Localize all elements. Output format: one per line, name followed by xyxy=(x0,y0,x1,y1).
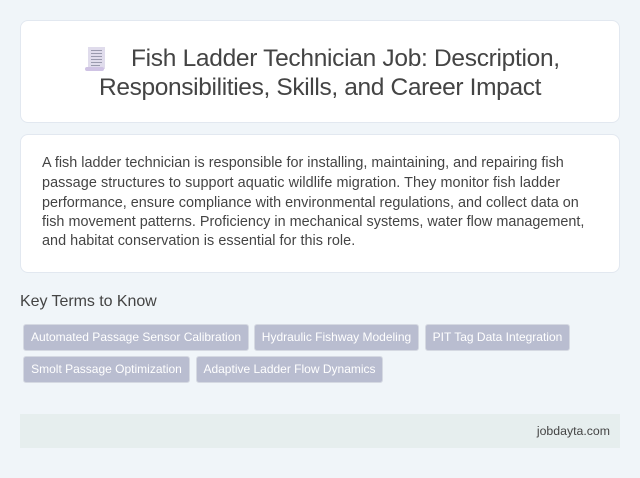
icon: paper scroll xyxy=(85,47,105,71)
description text: and habitat conservation is essential for this role. xyxy=(42,233,355,249)
description text: fish movement patterns. Proficiency in mechanical systems, water flow management, xyxy=(42,214,584,230)
panel: title card xyxy=(20,20,620,123)
title: Fish Ladder Technician Job: Description, xyxy=(131,45,560,72)
chip: sensor calibration: Automated Passage Sensor Calibration xyxy=(31,330,241,344)
title xyxy=(99,45,560,101)
chip: smolt passage xyxy=(23,356,190,383)
chip: smolt passage: Smolt Passage Optimization xyxy=(31,362,182,376)
chip: fishway modeling xyxy=(254,324,419,351)
description text: performance, ensure compliance with environmental regulations, and collect data on xyxy=(42,194,579,210)
footer source: jobdayta.com xyxy=(537,424,610,438)
chip: adaptive flow: Adaptive Ladder Flow Dynamics xyxy=(203,362,376,376)
description text xyxy=(42,155,584,249)
chip list: key terms xyxy=(23,324,570,383)
description text: A fish ladder technician is responsible for installing, maintaining, and repairing fish xyxy=(42,155,564,171)
description text: passage structures to support aquatic wildlife migration. They monitor fish ladder xyxy=(42,174,560,190)
chip: adaptive flow xyxy=(196,356,383,383)
footer bar xyxy=(20,414,620,448)
chip: fishway modeling: Hydraulic Fishway Modeling xyxy=(262,330,411,344)
chip: PIT tag xyxy=(425,324,570,351)
chip: PIT tag: PIT Tag Data Integration xyxy=(433,330,562,344)
panel: description card xyxy=(20,134,620,273)
chip: sensor calibration xyxy=(23,324,249,351)
title: Responsibilities, Skills, and Career Impact xyxy=(99,74,541,101)
heading: key terms: Key Terms to Know xyxy=(20,293,157,310)
